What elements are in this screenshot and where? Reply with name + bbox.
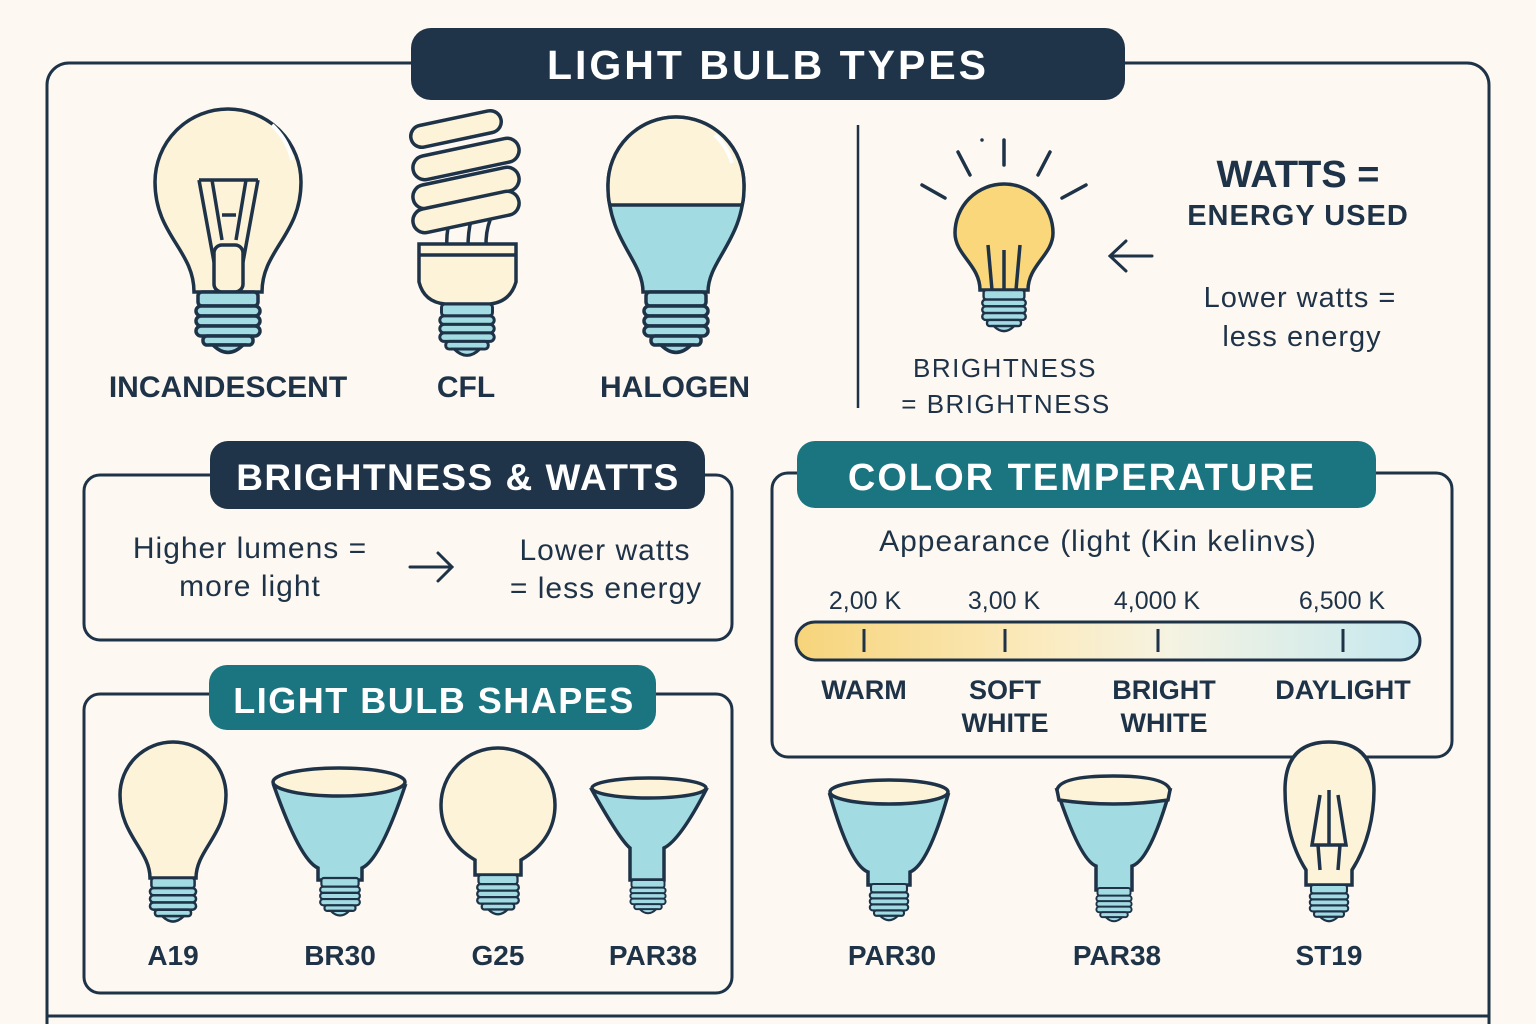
panel: light bulb shapes: G25 [472,940,524,971]
labels: outside shapes: PAR30 [848,940,936,971]
icon: halogen bulb [608,117,744,352]
panel: color temperature: SOFT [969,675,1042,705]
label: CFL: CFL [437,371,495,404]
panel: light bulb shapes: A19 [147,940,199,971]
text: watts = energy used [1187,154,1409,353]
text: brightness = brightness: = BRIGHTNESS [901,389,1111,419]
panel: brightness & watts: = less energy [510,572,702,605]
icon: PAR38 outside [1057,776,1170,921]
panel: light bulb shapes: PAR38 [609,940,697,971]
title: LIGHT BULB TYPES [547,42,989,88]
label: halogen: HALOGEN [600,371,750,404]
label: incandescent: INCANDESCENT [109,371,347,404]
panel: brightness & watts: BRIGHTNESS & WATTS [236,457,680,498]
panel: brightness & watts: more light [179,570,321,603]
panel: color temperature: 4,000 K [1114,587,1200,615]
panel: color temperature: BRIGHT [1112,675,1216,705]
panel: color temperature: WHITE [962,708,1048,738]
panel: color temperature: 2,00 K [829,587,901,615]
icon: PAR38 [592,778,706,913]
text: watts = energy used: Lower watts = [1204,282,1396,314]
panel: light bulb shapes [84,665,732,993]
panel: brightness & watts [84,441,732,640]
panel: color temperature: Appearance (light (Kin kelinvs) [879,525,1317,558]
panel: color temperature: COLOR TEMPERATURE [848,457,1316,499]
panel: color temperature: 3,00 K [968,587,1040,615]
panel: light bulb shapes: BR30 [304,940,376,971]
arrow: left [1110,241,1152,271]
panel: brightness & watts: Lower watts [519,534,691,567]
icon: G25 [441,748,555,914]
icon: A19 [120,742,226,922]
panel: color temperature: DAYLIGHT [1275,675,1411,705]
text: watts = energy used: less energy [1222,321,1382,353]
title [411,28,1125,100]
icon: PAR30 [830,780,948,920]
text: brightness = brightness [901,353,1111,419]
text: watts = energy used: WATTS = [1217,154,1379,196]
icon: CFL bulb [409,109,521,355]
labels: outside shapes: ST19 [1296,940,1362,971]
panel: brightness & watts: Higher lumens = [133,532,367,565]
panel: color temperature: WHITE [1120,708,1208,738]
icon: brightness bulb [922,140,1086,331]
text: brightness = brightness: BRIGHTNESS [913,353,1097,383]
panel: color temperature: 6,500 K [1299,587,1385,615]
panel: light bulb shapes: LIGHT BULB SHAPES [233,680,635,721]
labels: outside shapes: PAR38 [1073,940,1161,971]
icon: incandescent bulb [155,109,301,352]
icon: BR30 [273,768,405,916]
text: watts = energy used: ENERGY USED [1187,200,1409,232]
panel: color temperature [772,441,1452,757]
icon: ST19 [1285,742,1374,921]
panel: color temperature: WARM [821,675,907,705]
divider [857,125,859,408]
labels: outside shapes [848,940,1362,971]
